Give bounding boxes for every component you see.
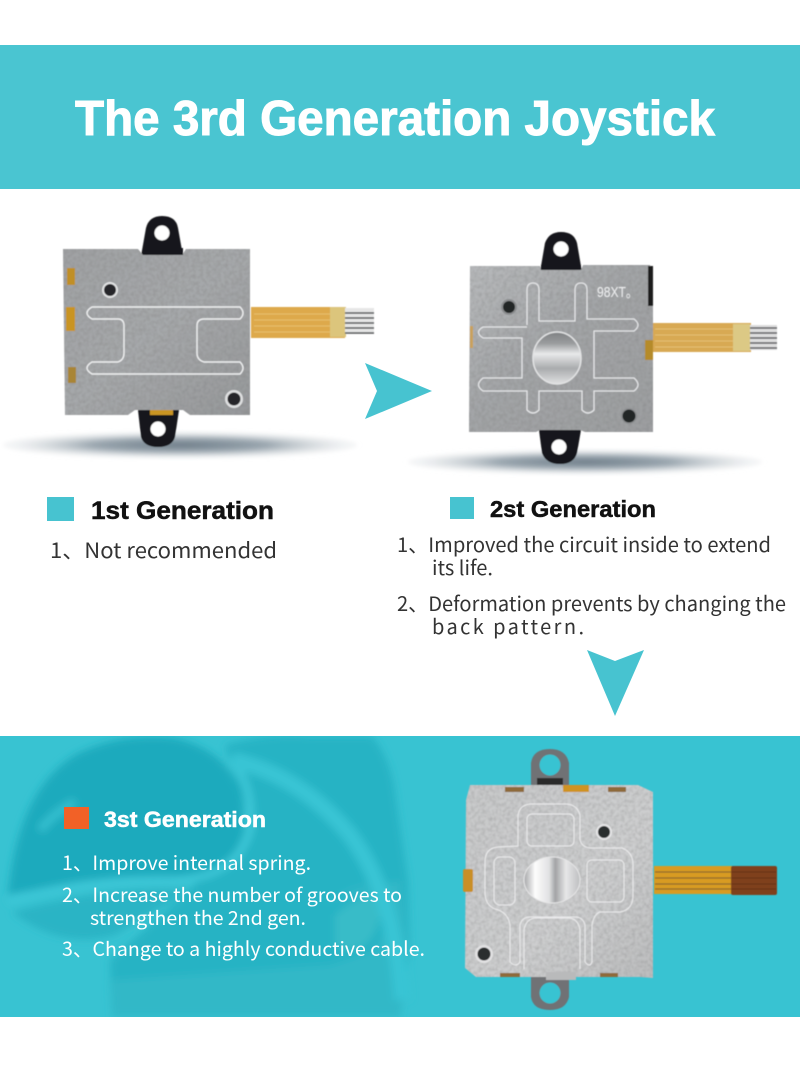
icon: mounting tabs bbox=[138, 216, 183, 447]
background: headphone wearer photo tint bbox=[8, 735, 410, 1017]
central dome bbox=[533, 332, 581, 384]
groove pattern bbox=[478, 283, 638, 413]
heading: 2nd generation: 2st Generation bbox=[490, 496, 656, 522]
icon: ribbon cable bbox=[654, 866, 777, 895]
icon: ribbon cable bbox=[653, 323, 777, 352]
text: 2nd generation notes: its life. bbox=[432, 552, 493, 581]
text: 2nd generation notes: 1、Improved the circuit inside to extend bbox=[397, 529, 771, 558]
title banner bbox=[0, 45, 800, 189]
floor shadow bbox=[2, 432, 358, 458]
metal body bbox=[463, 785, 653, 980]
text: 3rd generation notes: 3、Change to a highly conductive cable. bbox=[62, 933, 425, 962]
text: 2nd generation notes bbox=[397, 529, 786, 640]
panel: 3rd generation joystick photo bbox=[463, 749, 777, 1010]
text: 3rd generation notes: 1、Improve internal spring. bbox=[62, 847, 311, 876]
panel: 3rd generation band bbox=[0, 735, 800, 1017]
heading: 1st generation: 1st Generation bbox=[91, 497, 274, 525]
icon: mounting tabs bbox=[531, 749, 569, 1010]
icon: rivets bbox=[501, 299, 517, 315]
icon: ribbon cable bbox=[251, 307, 374, 338]
groove pattern bbox=[87, 307, 243, 374]
heading: 3rd generation: 3st Generation bbox=[104, 807, 266, 832]
title: The 3rd Generation Joystick bbox=[75, 92, 716, 146]
headband bbox=[232, 760, 402, 1000]
text: 3rd generation notes bbox=[62, 847, 425, 962]
head and hair bbox=[110, 736, 410, 980]
icon: rivets bbox=[596, 824, 612, 840]
central shaft bbox=[524, 857, 580, 903]
text: 1st generation notes: 1、Not recommended bbox=[50, 535, 277, 565]
metal body bbox=[469, 265, 653, 432]
arrow: down bbox=[587, 650, 644, 716]
icon: rivets bbox=[102, 282, 118, 298]
text: 2nd generation notes: 2、Deformation prevents by changing the bbox=[397, 588, 786, 617]
floor shadow bbox=[407, 450, 763, 474]
panel: 1st generation joystick photo bbox=[2, 216, 374, 458]
text: 3rd generation notes: strengthen the 2nd gen. bbox=[90, 902, 306, 931]
panel: 2nd generation joystick photo bbox=[407, 232, 777, 474]
groove pattern bbox=[485, 804, 633, 969]
icon: mounting tabs bbox=[539, 232, 582, 464]
cushion bbox=[8, 765, 262, 900]
face and ear bbox=[110, 880, 408, 1017]
ear cup bbox=[8, 737, 244, 895]
text: 3rd generation notes: 2、Increase the number of grooves to bbox=[62, 879, 402, 908]
arrow: right bbox=[365, 363, 432, 419]
text: 2nd generation notes: back pattern. bbox=[432, 611, 584, 640]
label: part marking: 98XT。 bbox=[597, 284, 638, 301]
metal body bbox=[63, 248, 250, 415]
